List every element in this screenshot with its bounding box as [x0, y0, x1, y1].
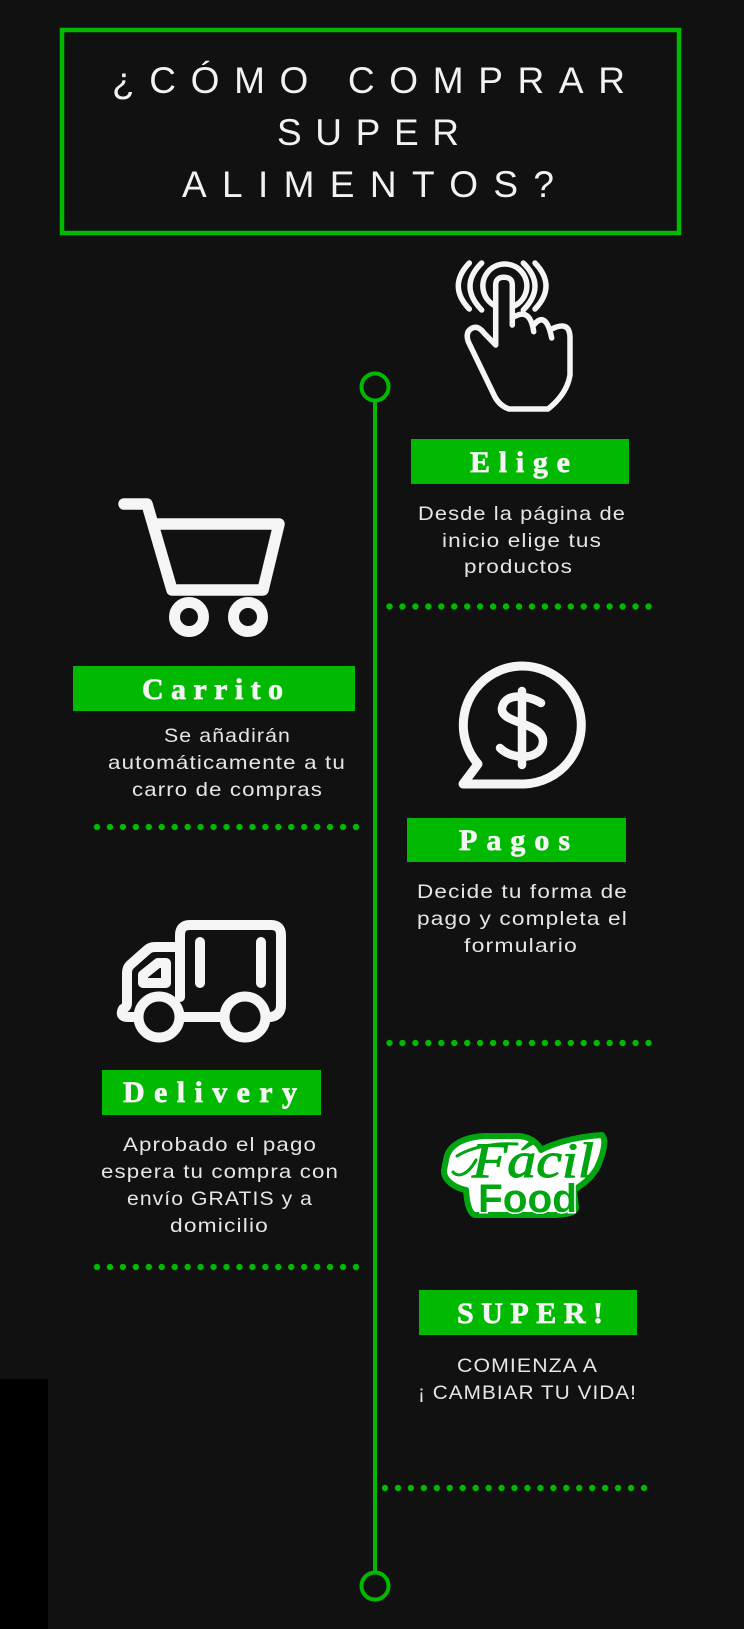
- step: Carrito: Se añadirán: [164, 725, 291, 747]
- step: Delivery: espera tu compra con: [101, 1161, 339, 1183]
- step: Carrito: [73, 666, 355, 801]
- step: Delivery: Aprobado el pago: [123, 1134, 317, 1156]
- dotted divider: [97, 1264, 358, 1270]
- step: Carrito: automáticamente a tu: [108, 752, 346, 774]
- step: Super: [418, 1290, 637, 1404]
- step: Elige: Desde la página de: [418, 503, 626, 525]
- step: Elige: inicio elige tus: [442, 530, 602, 552]
- logo: Fácil Food: Food: [478, 1177, 577, 1221]
- logo: Fácil Food: Fácil: [471, 1132, 594, 1188]
- dotted divider: [97, 824, 358, 830]
- step: Super: COMIENZA A: [457, 1355, 598, 1377]
- step: Super: SUPER!: [457, 1297, 603, 1330]
- step: Pagos: formulario: [464, 935, 578, 957]
- black corner block: [0, 1379, 48, 1629]
- icon: tapping hand: [458, 263, 570, 409]
- step: Elige: [411, 439, 629, 578]
- dotted divider: [390, 603, 650, 610]
- dotted divider: [385, 1485, 646, 1491]
- step: Delivery: domicilio: [170, 1215, 269, 1237]
- step: Elige: productos: [464, 556, 573, 578]
- step: Delivery: [101, 1070, 339, 1237]
- title box: SUPER: [277, 112, 459, 153]
- step: Super: ¡ CAMBIAR TU VIDA!: [418, 1382, 637, 1404]
- title box: ¿CÓMO COMPRAR: [112, 60, 625, 101]
- step: Pagos: Decide tu forma de: [417, 881, 628, 903]
- timeline: [362, 374, 388, 1600]
- dotted divider: [390, 1040, 650, 1046]
- title box: [62, 30, 679, 233]
- step: Pagos: pago y completa el: [417, 908, 628, 930]
- step: Delivery: Delivery: [123, 1076, 297, 1109]
- step: Elige: Elige: [470, 446, 570, 479]
- icon: shopping cart: [124, 504, 279, 632]
- logo: Fácil Food: [444, 1132, 604, 1221]
- step: Pagos: Pagos: [459, 824, 570, 857]
- step: Carrito: carro de compras: [132, 779, 323, 801]
- step: Carrito: Carrito: [142, 673, 283, 706]
- icon: delivery truck: [122, 925, 281, 1038]
- step: Delivery: envío GRATIS y a: [127, 1188, 313, 1210]
- step: Pagos: [407, 818, 628, 957]
- title box: ALIMENTOS?: [182, 164, 554, 205]
- icon: dollar speech bubble: [463, 666, 581, 784]
